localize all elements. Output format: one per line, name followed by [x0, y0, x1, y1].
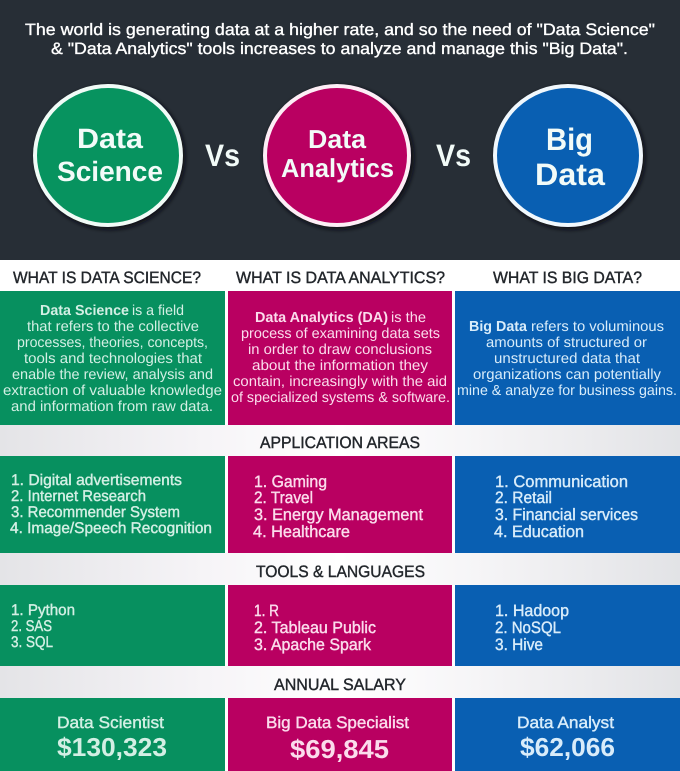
panel: data science definition: and information from raw data.	[11, 399, 213, 415]
panel: big data definition: Big Data	[469, 319, 528, 335]
panel: data analytics definition: is the	[391, 310, 426, 326]
circle: big data: Big	[546, 122, 593, 157]
panel: big data definition: refers to voluminous	[531, 319, 664, 335]
panel: data science definition: processes, theories, concepts,	[17, 335, 208, 351]
panel: data science applications	[0, 456, 225, 553]
panel: big data definition	[455, 291, 680, 425]
panel: big data specialist salary: Big Data Specialist	[266, 714, 409, 732]
panel: data analyst salary: Data Analyst	[517, 714, 614, 732]
panel: data science tools: 3. SQL	[11, 634, 53, 651]
panel: data science definition: tools and technologies that	[24, 351, 202, 367]
panel: data analytics applications	[228, 456, 452, 553]
panel: data analytics applications: 3. Energy Management	[254, 506, 423, 524]
panel: data analytics tools: 3. Apache Spark	[254, 636, 372, 654]
panel: data science applications: 2. Internet Research	[11, 488, 146, 505]
circle: data science	[35, 86, 185, 230]
panel: data science definition: is a field	[132, 303, 184, 319]
label: vs: Vs	[436, 138, 471, 173]
panel: big data tools	[455, 585, 680, 666]
panel: data analytics tools: 2. Tableau Public	[254, 619, 376, 637]
panel: big data tools: 2. NoSQL	[495, 619, 561, 637]
intro text: & "Data Analytics" tools increases to analyze and manage this "Big Data".	[51, 40, 628, 58]
band: application areas: APPLICATION AREAS	[260, 434, 420, 452]
panel: data science tools: 1. Python	[11, 602, 75, 619]
panel: data science tools	[0, 585, 225, 666]
panel: data analytics tools: 1. R	[254, 602, 279, 620]
circle: data analytics: Analytics	[281, 153, 394, 183]
panel: data scientist salary: Data Scientist	[57, 714, 164, 732]
intro text	[25, 21, 655, 58]
panel: big data definition: organizations can potentially	[473, 367, 662, 383]
panel: data science definition: enable the review, analysis and	[12, 367, 213, 383]
circle: data science: Science	[57, 156, 163, 187]
panel: data analytics definition: in order to draw conclusions	[248, 342, 432, 358]
panel: data analytics applications: 4. Healthcare	[253, 523, 350, 541]
panel: big data specialist salary: $69,845	[290, 734, 389, 764]
circle: big data: Data	[535, 157, 606, 192]
panel: data analytics applications: 2. Travel	[254, 489, 313, 507]
panel: big data applications	[455, 456, 680, 553]
panel: data analytics definition	[228, 291, 452, 425]
panel: data analytics tools	[228, 585, 452, 666]
header panel	[0, 0, 680, 260]
panel: data scientist salary: $130,323	[57, 732, 167, 762]
panel: big data tools: 3. Hive	[495, 636, 543, 654]
band: application areas	[0, 425, 680, 456]
panel: data analytics definition: contain, increasingly with the aid	[233, 374, 447, 390]
panel: data analyst salary: $62,066	[520, 732, 615, 762]
circle: big data	[495, 86, 645, 230]
band: annual salary	[0, 666, 680, 698]
column headings: WHAT IS DATA ANALYTICS?	[236, 269, 445, 287]
panel: data analytics definition: of specialized systems & software.	[231, 390, 450, 406]
panel: data analytics applications: 1. Gaming	[254, 473, 327, 491]
column headings	[0, 260, 680, 291]
label: vs: Vs	[205, 138, 240, 173]
band: tools and languages	[0, 553, 680, 585]
panel: data science tools: 2. SAS	[11, 618, 52, 635]
panel: big data applications: 1. Communication	[495, 473, 628, 491]
panel: big data applications: 3. Financial services	[495, 506, 638, 524]
column headings: WHAT IS BIG DATA?	[493, 269, 642, 287]
panel: data science definition: extraction of valuable knowledge	[3, 383, 222, 399]
panel: data analytics definition: process of examining data sets	[241, 326, 440, 342]
panel: big data tools: 1. Hadoop	[495, 602, 569, 620]
band: tools and languages: TOOLS & LANGUAGES	[256, 563, 425, 581]
intro text: The world is generating data at a higher rate, and so the need of "Data Science"	[25, 21, 655, 39]
panel: data analytics definition: Data Analytics (DA)	[255, 310, 388, 326]
panel: data analyst salary	[455, 698, 680, 771]
circle: data analytics	[264, 86, 414, 230]
panel: data analytics definition: about the information they	[252, 358, 429, 374]
column headings: WHAT IS DATA SCIENCE?	[13, 269, 201, 287]
panel: data science definition: Data Science	[40, 303, 129, 319]
panel: big data applications: 4. Education	[494, 523, 584, 541]
band: annual salary: ANNUAL SALARY	[274, 676, 406, 694]
panel: big data definition: mine & analyze for business gains.	[457, 383, 677, 399]
panel: big data definition: unstructured data that	[494, 351, 640, 367]
panel: data science applications: 1. Digital advertisements	[11, 472, 182, 489]
circle: data analytics: Data	[308, 124, 367, 154]
panel: big data specialist salary	[228, 698, 452, 771]
circle: data science: Data	[77, 123, 143, 154]
panel: big data applications: 2. Retail	[495, 489, 552, 507]
panel: data science applications: 3. Recommender System	[11, 504, 180, 521]
panel: data science definition: that refers to the collective	[27, 319, 199, 335]
panel: data science definition	[0, 291, 225, 425]
panel: data science applications: 4. Image/Speech Recognition	[10, 520, 212, 537]
panel: big data definition: amounts of structured or	[486, 335, 647, 351]
panel: data scientist salary	[0, 698, 225, 771]
